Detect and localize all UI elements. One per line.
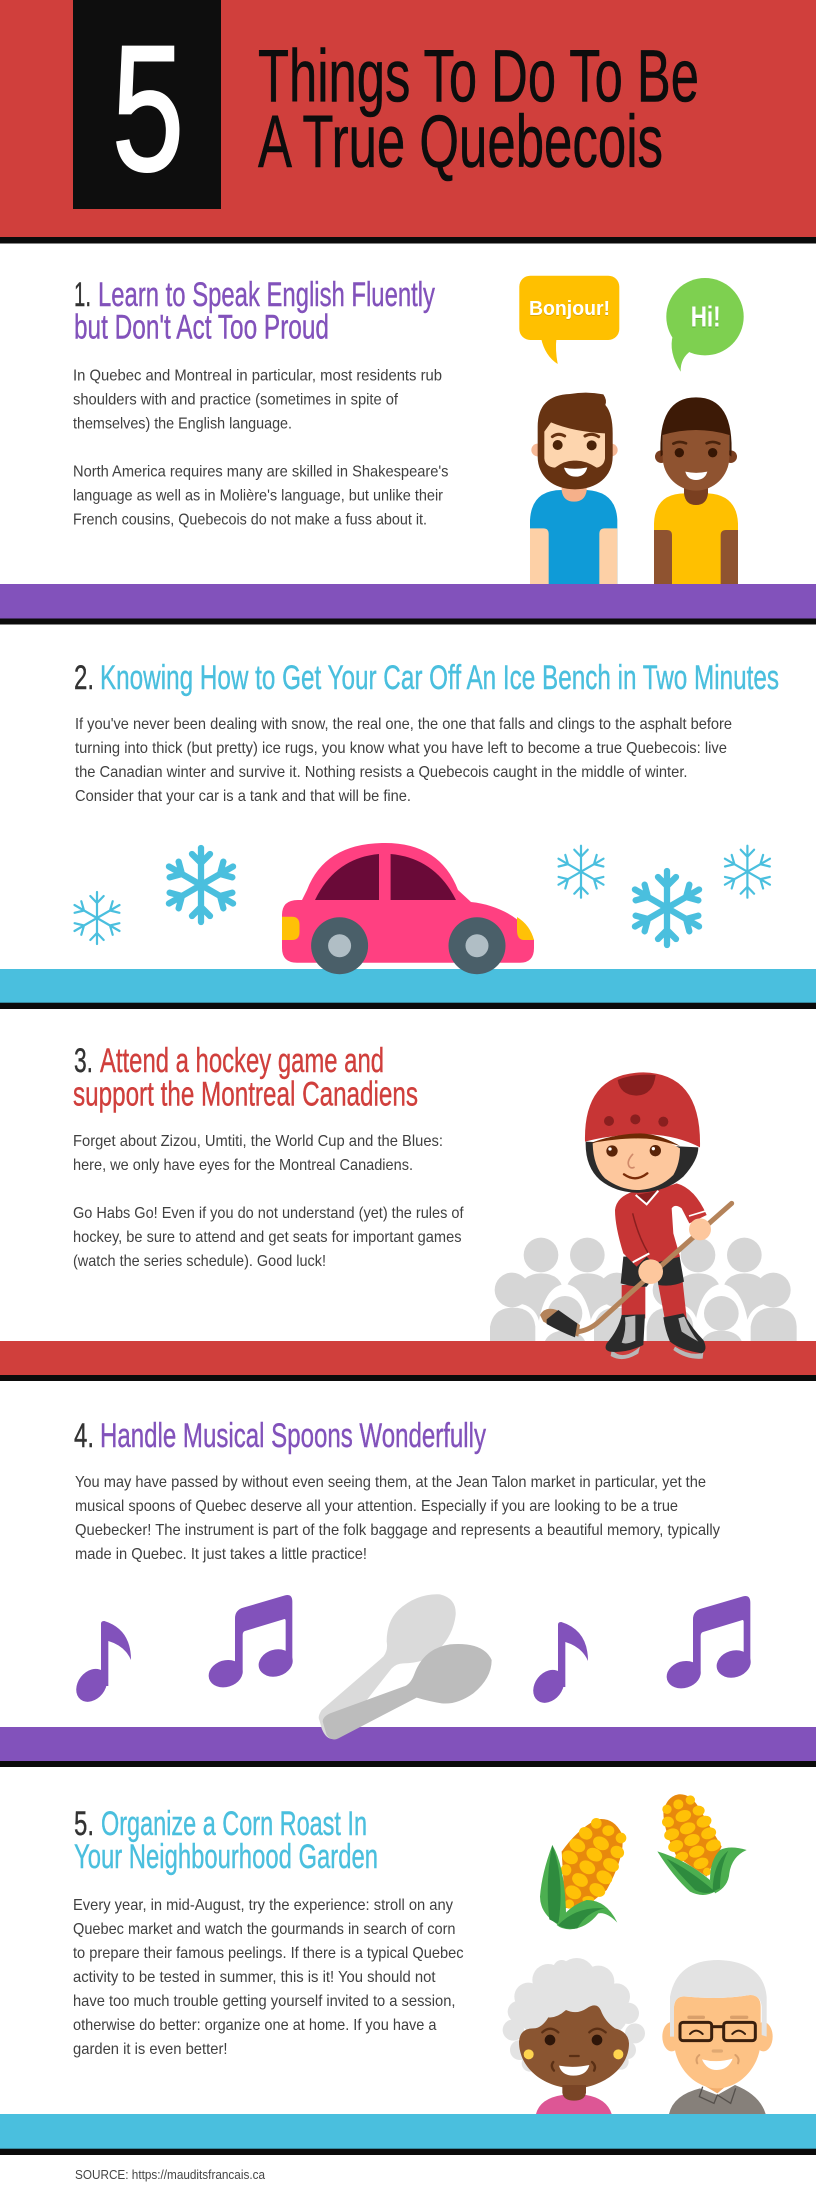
teal ground bar — [0, 969, 816, 1003]
icon: snowflakes — [71, 846, 773, 945]
text block 2: the Canadian winter and survive it. Nothing resists a Quebecois caught in the middle of winter. — [75, 764, 688, 781]
text block 1: French cousins, Quebecois do not make a fuss about it. — [73, 512, 427, 529]
text block 3: Forget about Zizou, Umtiti, the World Cup and the Blues: — [73, 1133, 443, 1150]
heading 1: Learn to Speak English Fluently — [98, 276, 435, 314]
panel: section 1 speak English — [0, 276, 816, 624]
text block 1: North America requires many are skilled in Shakespeare's — [73, 464, 448, 481]
heading 3 — [73, 1042, 418, 1114]
text block 5: activity to be tested in summer, this is it! You should not — [73, 1969, 436, 1986]
text block 3: here, we only have eyes for the Montreal Canadiens. — [73, 1157, 413, 1174]
heading 5: Organize a Corn Roast In — [101, 1805, 367, 1843]
heading 4: 4. — [74, 1417, 94, 1455]
heading 4 — [74, 1417, 486, 1455]
text block 1: themselves) the English language. — [73, 416, 292, 433]
heading 3: support the Montreal Canadiens — [73, 1076, 418, 1114]
text block 5: to prepare their famous peelings. If there is a typical Quebec — [73, 1945, 464, 1962]
heading 1: but Don't Act Too Proud — [74, 308, 329, 346]
heading 5: Your Neighbourhood Garden — [74, 1838, 378, 1876]
purple ground bar — [0, 1727, 816, 1761]
text block 5 — [73, 1897, 464, 2058]
panel: section 2 car off the ice — [0, 659, 816, 1009]
icon: spoons — [319, 1594, 492, 1739]
purple ground bar — [0, 584, 816, 619]
text block 3 — [73, 1133, 464, 1270]
speech bubble: Bonjour: Bonjour! — [529, 298, 610, 320]
speech bubble: Hi: Hi! — [691, 302, 721, 334]
number badge: 5 — [112, 8, 184, 208]
panel: section 3 hockey game — [0, 1042, 816, 1381]
text block 5: otherwise do better: organize one at home. If you have a — [73, 2017, 437, 2034]
text block 2 — [75, 716, 732, 805]
icon: corn cob right — [657, 1794, 747, 1895]
red ground bar — [0, 1341, 816, 1375]
text block 5: garden it is even better! — [73, 2041, 228, 2058]
heading 1 — [74, 276, 435, 346]
icon: grandmother — [503, 1958, 645, 2114]
heading 4: Handle Musical Spoons Wonderfully — [100, 1417, 486, 1455]
text block 4: You may have passed by without even seeing them, at the Jean Talon market in particular, yet the — [75, 1474, 706, 1491]
text block 3: Go Habs Go! Even if you do not understand (yet) the rules of — [73, 1205, 464, 1222]
text block 2: Consider that your car is a tank and that will be fine. — [75, 788, 411, 805]
source note: SOURCE: https://mauditsfrancais.ca — [75, 2167, 266, 2182]
text block 4 — [75, 1474, 720, 1563]
icon: grandfather — [662, 1960, 773, 2114]
text block 2: If you've never been dealing with snow, the real one, the one that falls and clings to the asphalt before — [75, 716, 732, 733]
icon: bearded man — [530, 393, 618, 584]
number badge — [73, 0, 221, 209]
text block 4: Quebecker! The instrument is part of the folk baggage and represents a beautiful memory, typically — [75, 1522, 720, 1539]
icon: hockey player — [540, 1072, 732, 1359]
text block 4: musical spoons of Quebec deserve all your attention. Especially if you are looking to be a true — [75, 1498, 678, 1515]
teal ground bar — [0, 2114, 816, 2149]
icon: music notes — [70, 1595, 754, 1709]
text block 3: (watch the series schedule). Good luck! — [73, 1253, 326, 1270]
text block 1: language as well as in Molière's language, but unlike their — [73, 488, 444, 505]
title — [258, 34, 699, 183]
heading 2: 2. — [74, 659, 94, 697]
text block 5: have too much trouble getting yourself invited to a session, — [73, 1993, 456, 2010]
icon: corn cob left — [540, 1818, 626, 1929]
panel: section 5 corn roast — [0, 1794, 816, 2155]
text block 5: Quebec market and watch the gourmands in search of corn — [73, 1921, 456, 1938]
heading 3: 3. — [74, 1042, 93, 1080]
heading 5: 5. — [74, 1805, 94, 1843]
panel: section 4 musical spoons — [0, 1417, 816, 1767]
icon: man with yellow shirt — [654, 397, 738, 584]
text block 2: turning into thick (but pretty) ice rugs, you know what you have left to become a true Quebecois: live — [75, 740, 727, 757]
heading 3: Attend a hockey game and — [100, 1042, 384, 1080]
heading 1: 1. — [74, 276, 91, 314]
speech bubble: Bonjour — [519, 276, 619, 364]
text block 1: shoulders with and practice (sometimes in spite of — [73, 392, 399, 409]
heading 5 — [74, 1805, 378, 1876]
crowd silhouettes — [490, 1238, 797, 1341]
text block 5: Every year, in mid-August, try the experience: stroll on any — [73, 1897, 453, 1914]
icon: pink car — [282, 843, 534, 974]
text block 1: In Quebec and Montreal in particular, most residents rub — [73, 368, 442, 385]
speech bubble: Hi — [666, 278, 744, 372]
header banner — [0, 0, 816, 244]
text block 1 — [73, 368, 448, 529]
text block 4: made in Quebec. It just takes a little practice! — [75, 1546, 367, 1563]
text block 3: hockey, be sure to attend and get seats for important games — [73, 1229, 462, 1246]
